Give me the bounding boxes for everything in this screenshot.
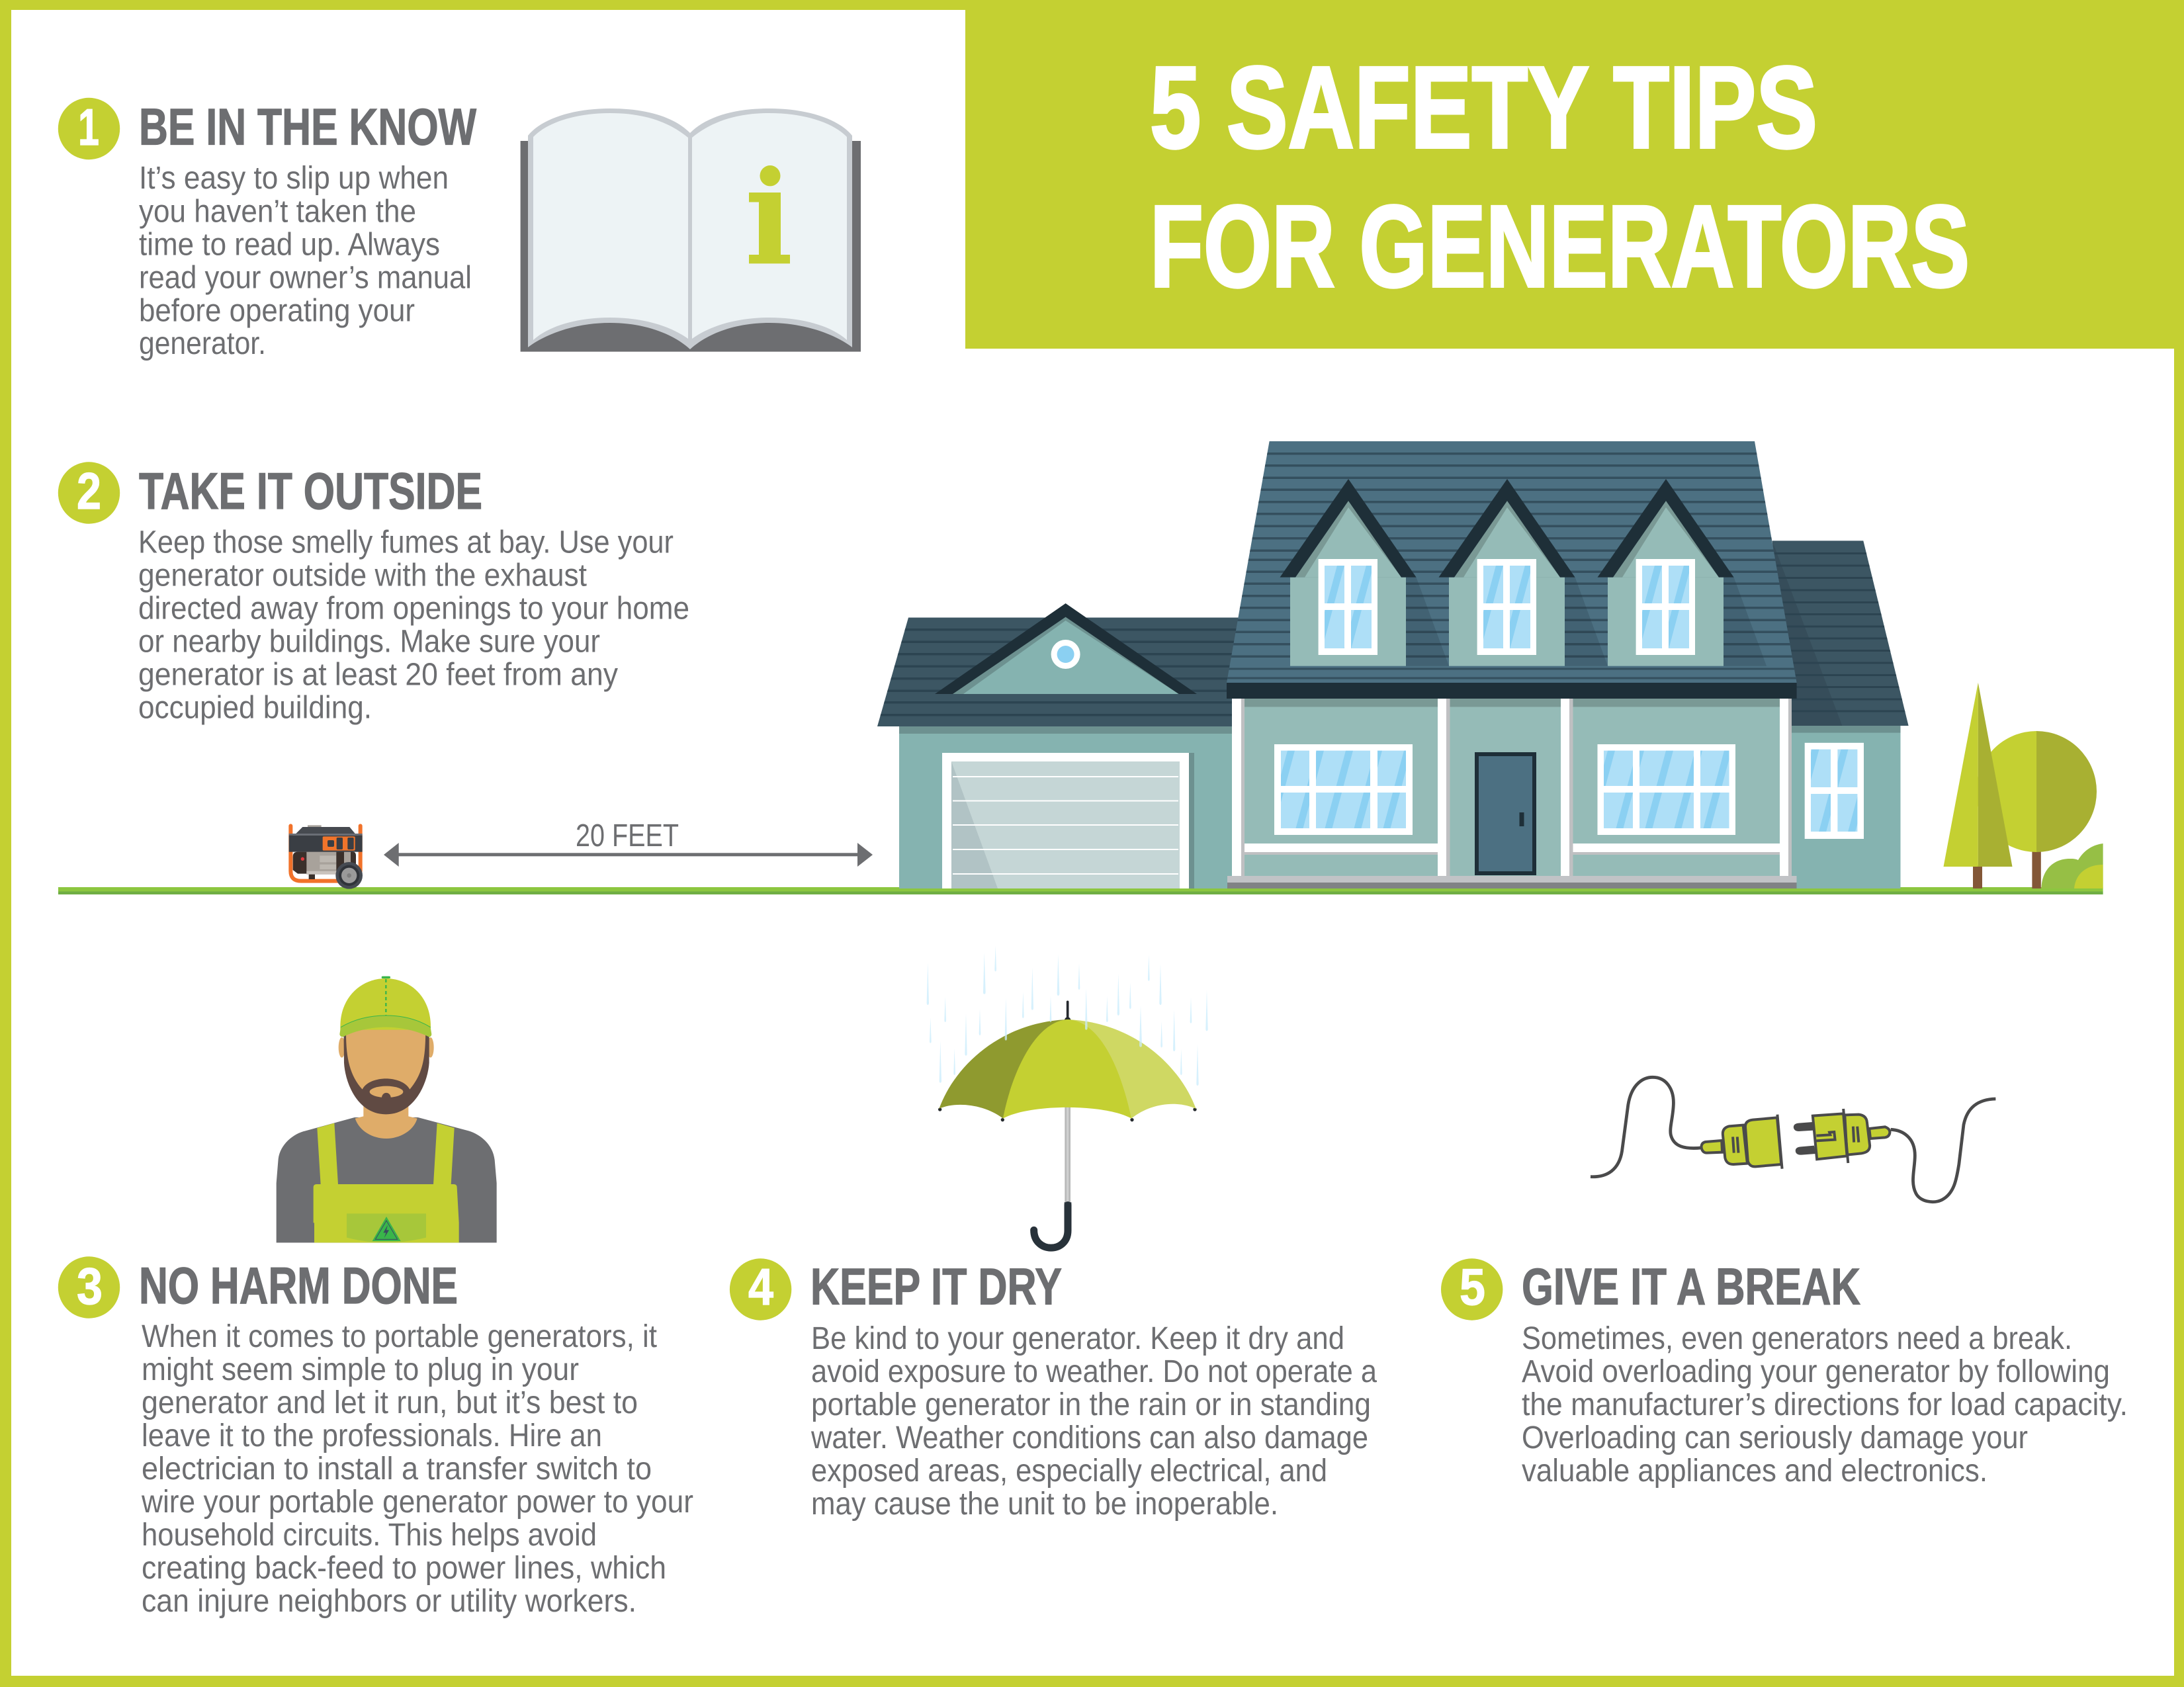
body text 1: It’s easy to slip up when [139,161,449,196]
illustration: trees and bush [1944,683,2103,888]
body text 5: the manufacturer’s directions for load capacity. [1522,1387,2128,1422]
panel: tip 3 no harm done [58,976,693,1619]
panel: tip 1 be in the know [58,98,861,361]
icon: portable generator [289,825,363,889]
body text 3 [141,1319,693,1619]
porch steps [1227,876,1797,888]
icon: electrician worker [277,976,497,1242]
body text 3: When it comes to portable generators, it [142,1319,657,1354]
arrow: 20 feet distance [384,818,873,867]
bush [2042,844,2103,888]
garage wall [899,726,1232,888]
body text 5: valuable appliances and electronics. [1522,1453,1987,1489]
body text 4: avoid exposure to weather. Do not operate a [811,1354,1377,1389]
badge 4 [730,1258,791,1320]
body text 5: Avoid overloading your generator by following [1522,1354,2110,1389]
body text 2: generator is at least 20 feet from any [138,658,618,693]
body text 1 [139,161,472,361]
right porch window [1597,744,1735,835]
right wing wall [1792,726,1900,888]
heading 5: GIVE IT A BREAK [1522,1258,1860,1316]
badge 2 [58,462,120,524]
body text 4: water. Weather conditions can also damage [810,1420,1368,1455]
badge 3: 3 [77,1257,103,1315]
heading 3: NO HARM DONE [139,1256,458,1315]
body text 3: household circuits. This helps avoid [142,1518,597,1553]
body text 5: Overloading can seriously damage your [1522,1420,2028,1455]
porch columns and rails [1232,699,1792,876]
dormer 3 [1597,479,1767,666]
roof fascia [1227,683,1797,707]
body text 4: exposed areas, especially electrical, and [811,1453,1327,1489]
body text 3: generator and let it run, but it’s best to [142,1385,638,1420]
garage door [942,753,1194,888]
body text 1: generator. [139,326,266,361]
body text 2 [138,525,689,726]
badge 5: 5 [1460,1258,1485,1316]
badge 5 [1441,1258,1503,1320]
body text 4: may cause the unit to be inoperable. [811,1487,1278,1522]
body text 2: Keep those smelly fumes at bay. Use your [138,525,674,560]
badge 2: 2 [77,462,101,520]
body text 5 [1522,1321,2128,1489]
title line 1: 5 SAFETY TIPS [1150,43,1817,173]
panel: tip 2 take it outside [58,462,689,726]
front door [1475,752,1536,875]
body text 1: before operating your [139,294,415,328]
heading 2: TAKE IT OUTSIDE [139,462,482,520]
badge 3 [58,1256,120,1319]
body text 2: occupied building. [138,691,372,726]
panel: tip 5 give it a break [1441,1077,2128,1489]
left porch window [1274,744,1413,835]
dormer 1 [1280,479,1449,666]
body text 1: you haven’t taken the [139,195,416,229]
body text 3: wire your portable generator power to your [141,1485,693,1520]
body text 2: or nearby buildings. Make sure your [138,625,600,660]
round tree [1976,731,2097,888]
body text 2: generator outside with the exhaust [138,558,587,593]
body text 5: Sometimes, even generators need a break. [1522,1321,2072,1356]
icon: open book with info mark [521,108,861,352]
badge 4: 4 [748,1258,773,1316]
main roof [1224,441,1800,683]
body text 3: can injure neighbors or utility workers. [142,1584,636,1619]
icon: umbrella in rain [927,946,1208,1248]
dormer 2 [1438,479,1608,666]
body text 4 [810,1321,1377,1522]
panel: tip 4 keep it dry [730,946,1377,1522]
heading 1: BE IN THE KNOW [139,98,476,156]
body text 3: creating back-feed to power lines, which [142,1551,666,1586]
distance label: 20 FEET [576,818,679,853]
icon: unplugged power cord [1591,1077,1995,1202]
body text 4: portable generator in the rain or in standing [811,1387,1371,1422]
body text 3: leave it to the professionals. Hire an [142,1418,602,1453]
body text 2: directed away from openings to your home [138,591,689,627]
garage gable [935,603,1197,694]
ground line [58,887,2103,894]
badge 1 [58,98,120,159]
right wing roof [1767,541,1912,726]
badge 1: 1 [78,98,99,156]
body text 3: electrician to install a transfer switch to [142,1451,652,1487]
pine tree [1944,683,2013,888]
heading 4: KEEP IT DRY [810,1258,1062,1316]
garage roof [873,618,1244,726]
main house wall [1232,699,1792,876]
panel: title banner [965,0,2184,349]
body text 1: time to read up. Always [139,228,440,262]
body text 1: read your owner’s manual [139,261,472,295]
body text 3: might seem simple to plug in your [142,1352,579,1387]
body text 4: Be kind to your generator. Keep it dry and [811,1321,1344,1356]
illustration: house [873,441,1912,888]
